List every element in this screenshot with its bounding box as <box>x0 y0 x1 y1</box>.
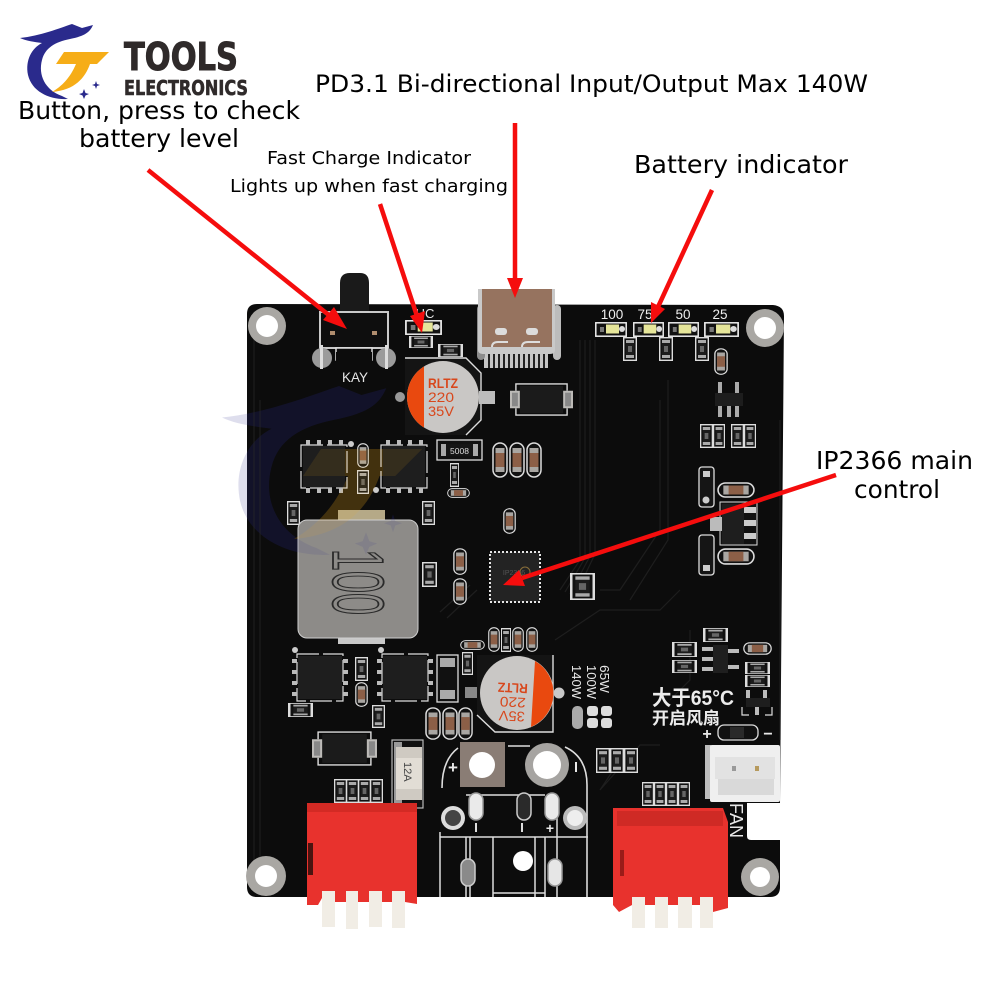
board traces <box>254 340 780 880</box>
MOSFETs bottom <box>292 647 433 701</box>
diode bottom <box>312 732 377 765</box>
label: IP2366: control <box>854 475 940 504</box>
fan control circuit <box>673 628 773 743</box>
logo mark <box>20 24 109 99</box>
passives around main IC <box>423 549 594 604</box>
label: button <box>18 96 301 153</box>
label: fast charge indicator <box>230 149 508 197</box>
power selection labels and pads: 100W <box>584 665 599 700</box>
FAN connector <box>705 745 780 838</box>
brand logo <box>20 24 248 100</box>
label: button: Button, press to check <box>18 96 301 125</box>
battery LED row: 75 <box>637 307 653 322</box>
fuse 12A: 12A <box>401 762 413 782</box>
Chinese silkscreen: fan on above 65C: 大于65°C <box>652 687 734 710</box>
capacitor 220uF bottom: RLTZ <box>497 679 528 696</box>
resistor group near left connector <box>335 780 382 802</box>
resistor groups near right connector <box>597 749 689 805</box>
small passives around top MOSFETs <box>288 440 541 533</box>
brand logo: ELECTRONICS <box>124 76 248 100</box>
push button KAY: KAY <box>342 370 368 385</box>
power pads and outline area: + <box>448 758 458 777</box>
label: fast charge indicator: Fast Charge Indicator <box>267 149 472 169</box>
fuse 12A <box>392 740 423 808</box>
small passives around bottom MOSFETs <box>289 628 537 739</box>
arrow: battery indicator <box>651 190 712 323</box>
label: fast charge indicator: Lights up when fast charging <box>230 177 508 197</box>
label: IP2366: IP2366 main <box>816 446 973 475</box>
board base <box>247 304 784 897</box>
power inductor 100 <box>298 510 418 644</box>
watermark tint on board <box>247 386 394 552</box>
capacitor 220uF top: RLTZ <box>428 376 458 391</box>
circuit board <box>222 273 784 897</box>
fan control circuit: − <box>763 726 773 743</box>
Chinese silkscreen: fan on above 65C: 开启风扇 <box>652 708 720 728</box>
right side regulators and passives <box>699 382 757 575</box>
label: battery indicator: Battery indicator <box>634 150 849 179</box>
capacitor 220uF bottom: 220 <box>499 694 526 711</box>
label: PD3.1: PD3.1 Bi-directional Input/Output Max 140W <box>315 70 868 98</box>
watermark tint over components <box>247 386 422 555</box>
arrow: fast charge <box>380 204 425 333</box>
battery LED row: 100 <box>601 307 623 322</box>
arrow: USB-C <box>507 123 523 298</box>
label: IP2366 <box>816 446 973 504</box>
power pads and outline area: + <box>546 820 554 836</box>
battery LED row: 50 <box>675 307 691 322</box>
battery LED row: 25 <box>712 307 728 322</box>
label: button: battery level <box>79 124 239 153</box>
HC fast charge LED <box>406 306 462 357</box>
power pads and outline area <box>440 742 588 897</box>
diode top <box>510 384 573 415</box>
capacitor 220uF top: 220 <box>428 389 454 405</box>
power selection labels and pads: 140W <box>569 665 584 700</box>
fan control circuit: + <box>702 726 712 743</box>
mounting holes <box>246 307 784 896</box>
main IC IP2366 <box>490 552 540 602</box>
USB-C connector <box>477 289 561 368</box>
battery LED row <box>596 307 738 374</box>
logo name: TOOLS <box>124 35 238 79</box>
watermark logo behind board <box>222 386 422 555</box>
push button KAY <box>312 273 396 385</box>
arrow: button <box>148 170 347 329</box>
power inductor 100: 100 <box>317 549 397 615</box>
power selection labels and pads: 65W <box>597 665 612 694</box>
capacitor 220uF bottom <box>477 655 564 732</box>
Chinese silkscreen: fan on above 65C <box>652 687 734 728</box>
capacitor 220uF top <box>395 358 495 435</box>
power selection labels and pads <box>569 665 612 729</box>
FAN connector: FAN <box>726 803 746 838</box>
small passives around top MOSFETs: 5008 <box>450 446 469 456</box>
left red terminal connector <box>307 803 417 929</box>
right red terminal connector <box>613 808 728 928</box>
main IC IP2366: IP2366 <box>503 570 525 577</box>
capacitor 220uF top: 35V <box>428 403 455 419</box>
arrow: main control <box>503 475 836 586</box>
capacitor 220uF bottom: 35V <box>498 708 525 725</box>
MOSFETs top <box>301 440 427 493</box>
HC fast charge LED: HC <box>416 306 434 321</box>
